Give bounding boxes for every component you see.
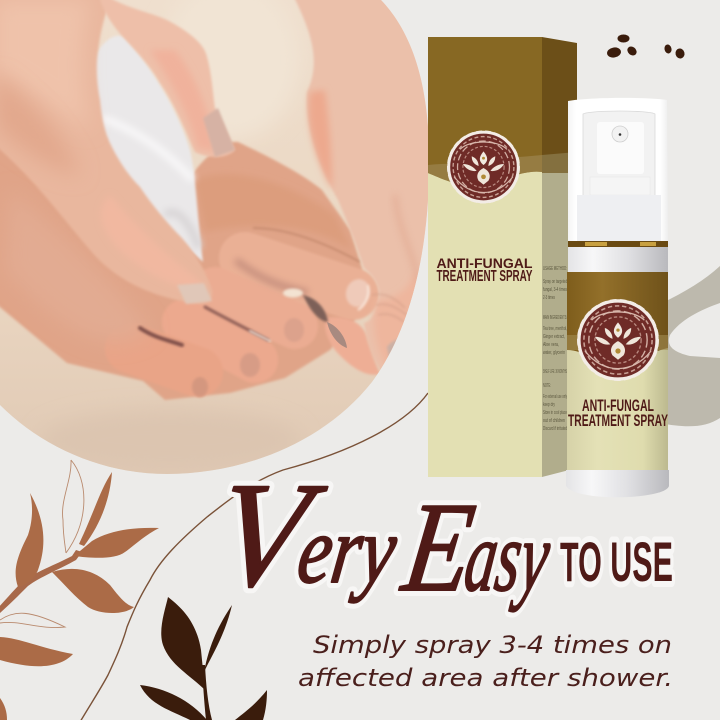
fingernails [203,108,235,157]
box side label text: 2-3 times [543,295,555,301]
box product name [436,255,533,285]
gap between toes [283,288,303,298]
copper leaf branch [0,460,159,720]
box side label text: Ginger extract, [543,334,565,340]
box product name: ANTI-FUNGAL [436,255,533,271]
box side label text: USAGE METHOD: [543,266,567,272]
box side lower [542,173,577,477]
headline outline: V [207,452,333,618]
bottle pattern band [567,335,668,350]
product box [428,37,577,477]
box side face [542,37,577,175]
foot [0,140,372,400]
headline script word easy: asy [459,500,557,612]
headline script word easy [394,476,557,618]
foot shading [5,174,360,345]
bottle label body [567,272,668,471]
held little toe [325,317,380,375]
box medallion [448,132,519,202]
box side label text [543,266,567,432]
box side label text: NOTE: [543,383,551,389]
box side label text: Aloe vera, [543,342,559,348]
decorative swoosh behind bottle [660,266,720,426]
headline script word very: V [207,452,333,618]
gold band [568,241,668,247]
spray bottle [93,36,203,262]
box side label text: keep dry [543,402,555,408]
headline outline [207,452,673,618]
product box: SHELF LIFE: 36 MONTHS [543,369,567,375]
box side label text: Discard if irritated [543,426,567,432]
usage description [298,631,673,692]
spray bottle product [566,98,669,497]
box side label text: fungal, 3-4 times [543,287,567,293]
usage description: affected area after shower. [298,664,673,692]
box product name: TREATMENT SPRAY [436,268,533,285]
decorative dark spots [606,34,686,59]
box front face [428,37,542,477]
second toe [185,322,255,360]
bottle medallion [578,300,658,380]
box side label text: out of children [543,418,565,424]
transparent cap window [583,111,655,196]
bottle cap [568,98,668,243]
third toe [215,290,295,326]
box side label text: water, glycerin [543,350,565,356]
box side label text: Tea tree, menthol, [543,326,567,332]
box side label text: Spray on targeted [543,279,567,285]
bottle brown label [567,272,668,373]
bottle white shoulder [568,247,668,273]
box pattern band [428,155,542,185]
headline script word very: ery [292,496,403,603]
headline outline: E [394,476,482,618]
decorative curved line [80,393,428,720]
headline outline: asy [459,500,557,612]
headline script word very [207,452,403,618]
ribbed collar [577,195,661,241]
box brown top [428,37,542,185]
big toe [130,348,198,372]
nails and shadow among fingers [303,295,328,322]
headline outline: ery [292,496,403,603]
right hand [293,0,435,375]
box side label text: Store in cool place [543,410,567,416]
box side label text: For external use only [543,394,567,400]
fourth toe [245,258,353,294]
bottle product name: ANTI-FUNGAL [582,396,654,415]
headline script word easy: E [394,476,482,618]
usage description: Simply spray 3-4 times on [313,631,672,659]
bottle base [566,470,669,497]
dark leaf branch [140,597,267,720]
left hand palm and thumb [0,0,212,304]
toenails [192,276,373,397]
bottle product name [568,396,668,430]
headline [207,452,673,618]
photo: hands spraying foot [0,0,435,480]
pump head [590,122,650,195]
index finger [100,0,235,157]
product box: MAIN INGREDIENTS: [543,315,567,321]
